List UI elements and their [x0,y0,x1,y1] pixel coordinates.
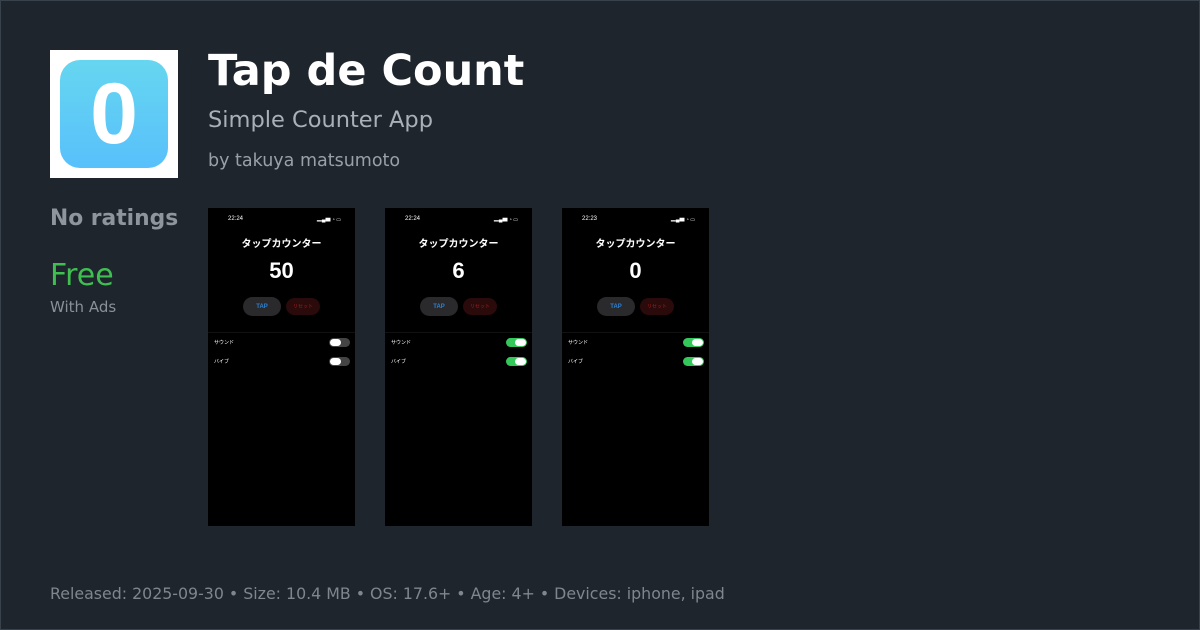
ads note: With Ads [50,298,116,316]
screenshot 3: リセット [647,304,667,310]
screenshot 2: ▂▄▆ ◔ ▭ [494,217,518,223]
screenshot 1: TAP [256,304,268,310]
screenshot 3: TAP [610,304,622,310]
screenshot 3: タップカウンター [596,239,676,250]
screenshot 2: リセット [470,304,490,310]
screenshot 3: ▂▄▆ ◔ ▭ [671,217,695,223]
screenshot 3: 22:23 [582,216,597,222]
screenshot 2: 6 [452,258,465,283]
subtitle: Simple Counter App [208,107,433,133]
screenshot 3: 0 [629,258,642,283]
icon: app icon: 0 [90,66,138,162]
screenshot 3: バイブ [568,359,583,365]
screenshot 1: ▂▄▆ ◔ ▭ [317,217,341,223]
price: Free [50,258,114,293]
screenshot 1: バイブ [214,359,229,365]
screenshot 2: サウンド [391,340,411,346]
screenshot 2 [385,208,532,526]
screenshot 3: サウンド [568,340,588,346]
screenshot 1: リセット [293,304,313,310]
icon: app icon [50,50,178,178]
author: by takuya matsumoto [208,151,400,171]
screenshot 2: タップカウンター [418,239,498,250]
ratings: No ratings [50,206,178,231]
screenshot 1: タップカウンター [242,239,322,250]
screenshot 1 [208,208,355,526]
screenshot 3 [562,208,709,526]
screenshot 1: 22:24 [228,216,243,222]
footer metadata: Released: 2025-09-30 • Size: 10.4 MB • OS: 17.6+ • Age: 4+ • Devices: iphone, ipad [50,584,725,603]
screenshot 2: バイブ [391,359,406,365]
title: Tap de Count [208,46,524,96]
screenshot 2: TAP [433,304,445,310]
screenshot 1: 50 [269,258,294,283]
screenshot 2: 22:24 [405,216,420,222]
screenshot 1: サウンド [214,340,234,346]
